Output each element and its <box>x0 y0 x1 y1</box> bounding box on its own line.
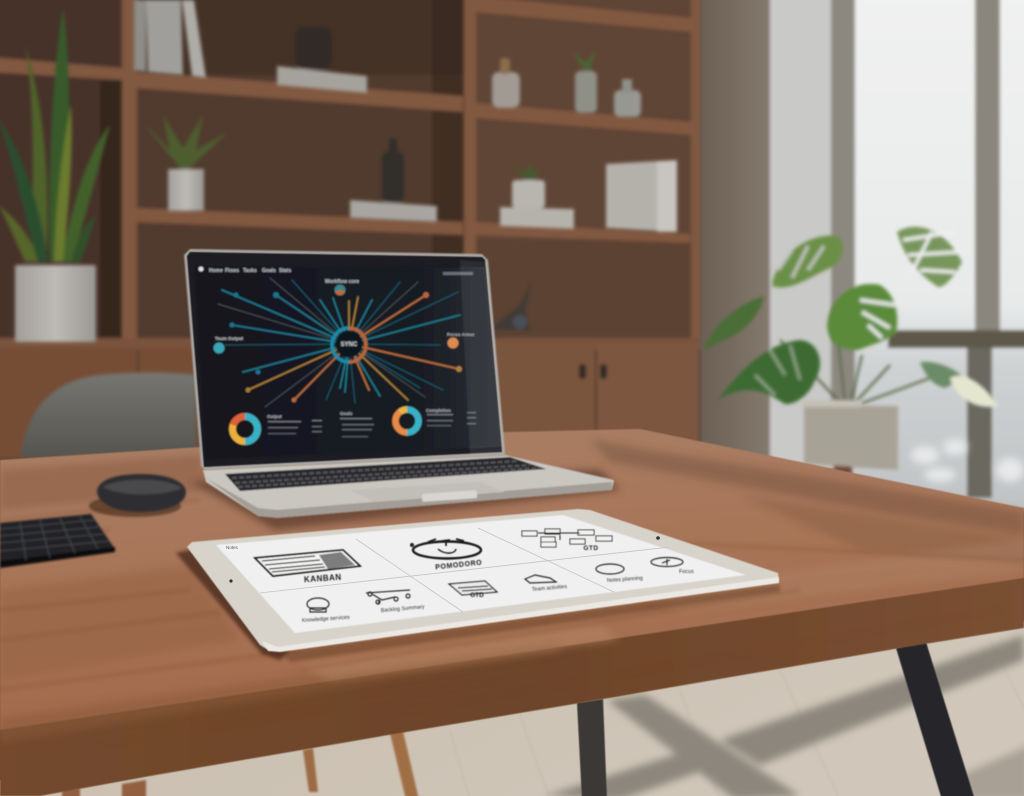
tablet small marks: Notes <box>226 545 239 550</box>
shelf objects <box>134 0 677 330</box>
desk front edge <box>0 578 1024 796</box>
dark vase and book <box>277 27 367 93</box>
laptop base <box>203 455 614 518</box>
tablet small marks <box>226 536 660 583</box>
grain and shadows <box>0 440 1024 680</box>
tablet small labels: Team activities <box>532 584 568 593</box>
bottle and book <box>350 138 437 222</box>
chair <box>20 372 196 458</box>
screen top bar: Goals <box>262 268 276 274</box>
floor <box>0 620 1024 796</box>
tablet shadow <box>176 545 300 660</box>
back panels <box>0 0 692 350</box>
kanban icon <box>255 550 360 576</box>
radial chart <box>218 278 462 407</box>
window shadow on floor <box>545 635 1024 796</box>
node labels: Workflow core <box>325 279 359 285</box>
node labels: Team Output <box>215 336 243 341</box>
hub: SYNC <box>341 342 358 348</box>
laptop screen <box>194 260 505 460</box>
bottom icons <box>307 558 683 612</box>
tablet small labels <box>302 569 694 624</box>
screen top bar: Tasks <box>243 268 257 274</box>
monstera pot <box>802 400 898 470</box>
tablet screen <box>216 515 746 633</box>
bookshelf wall <box>0 0 710 460</box>
trackpad <box>350 482 505 502</box>
tablet small labels: GTD <box>470 592 484 599</box>
metal legs <box>577 699 607 796</box>
stats text: Goals <box>340 411 353 416</box>
right column objects <box>492 50 677 330</box>
stats text <box>267 408 476 437</box>
keyboard <box>0 514 115 568</box>
monstera plant <box>704 227 998 407</box>
pot <box>15 265 96 342</box>
label gtd top: GTD <box>583 545 599 552</box>
hub <box>332 328 366 362</box>
laptop <box>184 249 620 530</box>
tablet grid lines <box>260 528 670 612</box>
cabinet base <box>0 338 702 458</box>
tablet body <box>187 509 779 652</box>
screen top bar: Flows <box>225 268 239 274</box>
desk legs and chair legs <box>62 699 607 796</box>
tablet small labels: Notes planning <box>607 576 643 584</box>
leaves <box>772 236 843 287</box>
shelves <box>0 0 702 345</box>
stats text: Output <box>267 414 282 419</box>
soft front edge blend <box>0 640 560 742</box>
mouse <box>89 474 186 517</box>
left snake plant <box>0 8 110 342</box>
window and wall <box>700 0 1024 510</box>
donut right <box>396 410 418 432</box>
small plant on shelf <box>143 115 228 211</box>
keyboard <box>225 457 546 491</box>
books top shelf <box>134 0 206 78</box>
screen top bar: Stats <box>279 268 291 274</box>
laptop shadow <box>192 470 620 530</box>
desk right leg <box>896 642 975 796</box>
tablet small labels: Knowledge services <box>302 615 350 624</box>
tablet small labels: Focus <box>679 569 694 575</box>
node labels: Focus Areas <box>447 332 475 337</box>
wooden chair legs <box>62 731 419 796</box>
node labels <box>214 279 475 354</box>
donut left <box>232 416 258 442</box>
flow chart icon <box>522 529 612 547</box>
window bokeh <box>911 439 1024 482</box>
desk top <box>0 429 1024 730</box>
laptop lid <box>184 249 505 470</box>
tablet <box>176 509 780 662</box>
pomodoro icon <box>410 539 481 558</box>
tablet small labels: Backlog Summary <box>381 604 425 614</box>
label pomodoro: POMODORO <box>435 560 483 571</box>
desk <box>0 429 1024 796</box>
screen top bar <box>198 266 473 275</box>
screen top bar: Home <box>209 268 223 274</box>
stats text: Completion <box>426 408 451 413</box>
label kanban: KANBAN <box>304 573 342 584</box>
